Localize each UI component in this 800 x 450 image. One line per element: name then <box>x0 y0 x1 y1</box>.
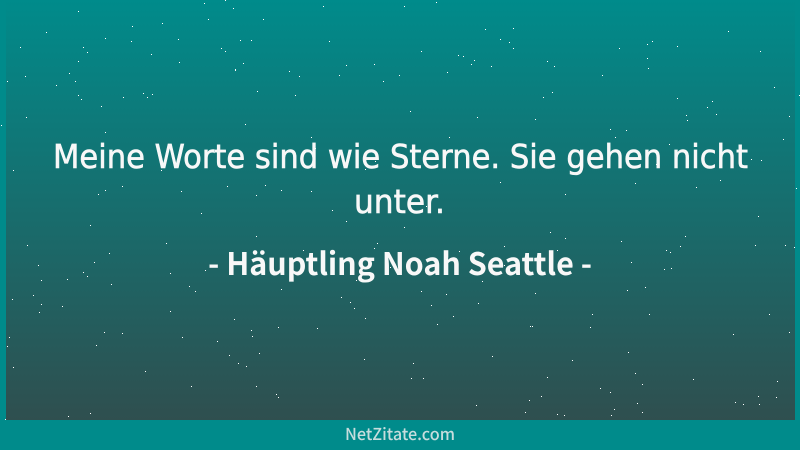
footer: site name: NetZitate.com <box>345 421 455 445</box>
quote text <box>53 137 748 221</box>
quote text: Meine Worte sind wie Sterne. Sie gehen nicht <box>53 137 748 176</box>
author attribution: - Häuptling Noah Seattle - <box>208 239 592 284</box>
quote text: unter. <box>354 182 445 221</box>
